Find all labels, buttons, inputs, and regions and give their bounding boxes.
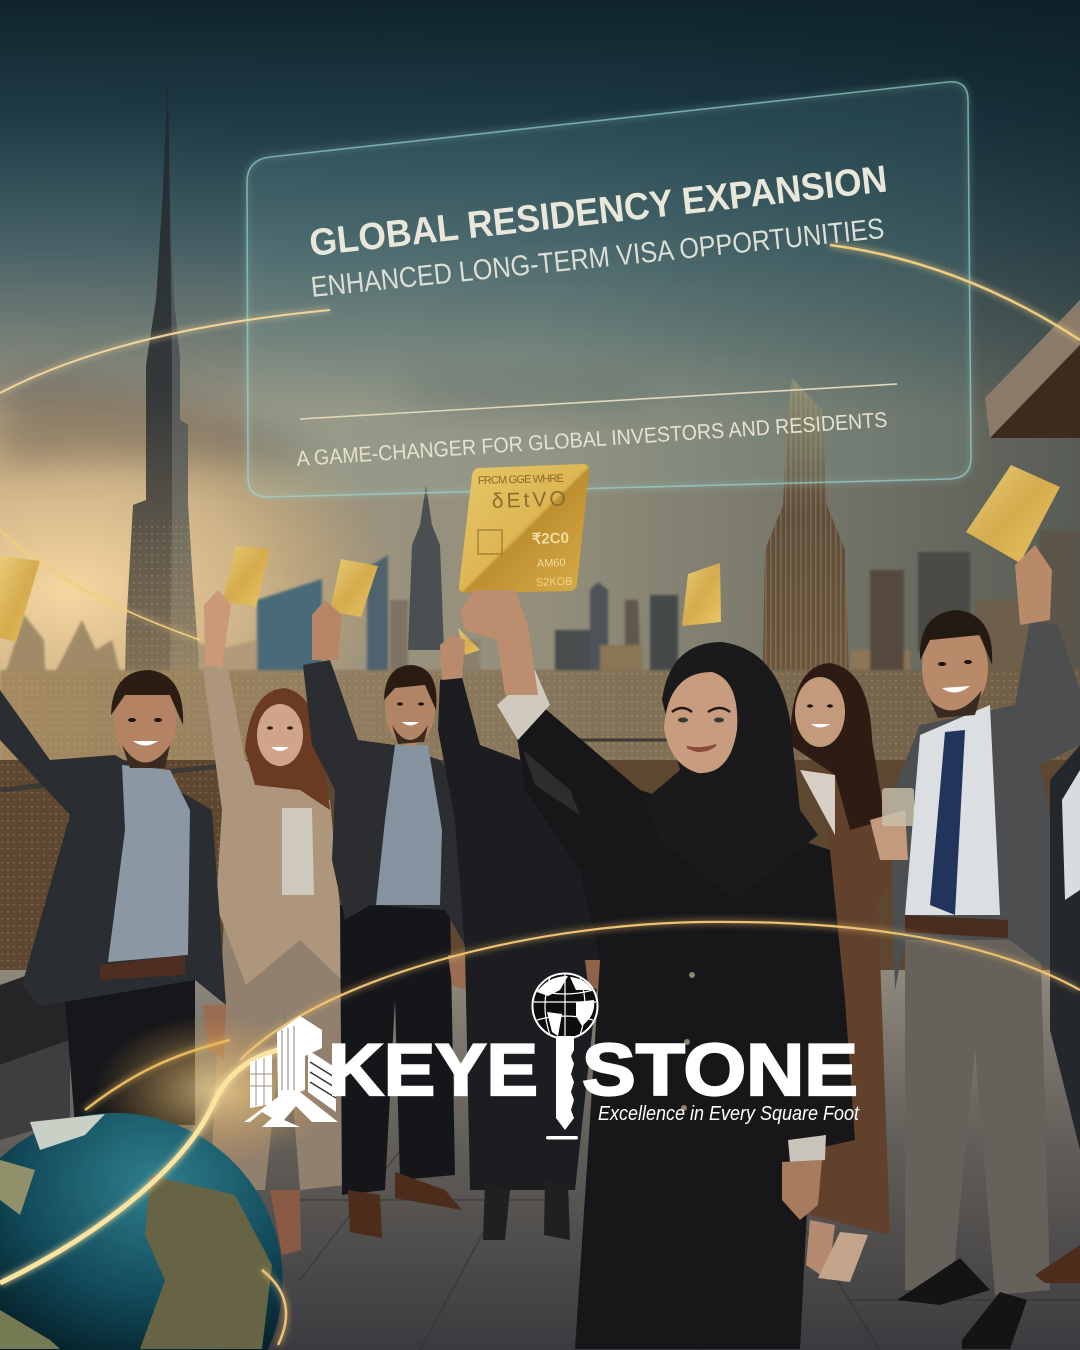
- logo wordmark right: STONE: [582, 1030, 858, 1111]
- person: man far left: [0, 670, 226, 1125]
- panel tagline: A GAME-CHANGER FOR GLOBAL INVESTORS AND RESIDENTS: [296, 408, 888, 471]
- main gold card: ₹2C0: [532, 530, 569, 548]
- logo: [244, 974, 860, 1140]
- main gold card: S2KOB: [536, 576, 573, 589]
- tower: Burj Khalifa: [124, 70, 200, 720]
- terrace floor: [0, 740, 1080, 1350]
- gold swooshes: [0, 922, 1080, 1345]
- gold cards held up: [0, 464, 1060, 655]
- card behind hand: [458, 628, 480, 655]
- face: [920, 610, 992, 718]
- person: man in dark jacket: [303, 600, 468, 1238]
- card far right: [966, 465, 1060, 563]
- city skyline: [0, 70, 1080, 980]
- logo icon: buildings: [244, 1016, 338, 1127]
- main gold card: δEtVO: [491, 487, 566, 513]
- tower: right golden skyscraper: [762, 378, 850, 710]
- hand at hip: [448, 955, 468, 990]
- logo key with globe head: [532, 974, 598, 1140]
- panel title: GLOBAL RESIDENCY EXPANSION: [307, 158, 889, 265]
- person: woman in beige: [203, 590, 347, 1255]
- background: dusk sky: [0, 0, 1080, 800]
- card 2: [222, 546, 270, 607]
- building overhang top right: [985, 300, 1080, 438]
- logo wordmark left: KEYE: [328, 1030, 538, 1111]
- glass in hand: [882, 788, 914, 826]
- face: [111, 670, 183, 768]
- main gold card: FRCM GGE WHRE: [478, 473, 564, 487]
- card far left: [0, 556, 40, 642]
- person: main woman in black abaya: [460, 590, 855, 1349]
- face: [664, 672, 737, 773]
- main gold card: [459, 464, 589, 593]
- hand at hip: [203, 1005, 226, 1060]
- gold orbit arc upper: [0, 245, 1080, 640]
- warm light flare: [95, 1015, 335, 1165]
- person: woman behind right: [790, 663, 895, 1282]
- panel subtitle: ENHANCED LONG-TERM VISA OPPORTUNITIES: [309, 213, 886, 304]
- glass panel: [247, 82, 971, 497]
- person: woman behind in black: [438, 635, 602, 1240]
- face: [384, 665, 436, 746]
- card 3: [330, 559, 378, 617]
- card right-center: [682, 563, 721, 626]
- logo tagline: Excellence in Every Square Foot: [598, 1103, 860, 1125]
- face: [795, 677, 845, 747]
- tower: centre skyscraper: [408, 485, 444, 650]
- globe: [0, 1113, 283, 1350]
- person: man at right edge: [1035, 745, 1080, 1283]
- buttons: [681, 972, 695, 1111]
- face: [257, 704, 303, 766]
- main gold card: AM60: [537, 557, 566, 570]
- person: man on right in grey suit: [870, 545, 1080, 1349]
- cuff and hand: [788, 1135, 826, 1162]
- city lights below terrace: [0, 760, 1080, 980]
